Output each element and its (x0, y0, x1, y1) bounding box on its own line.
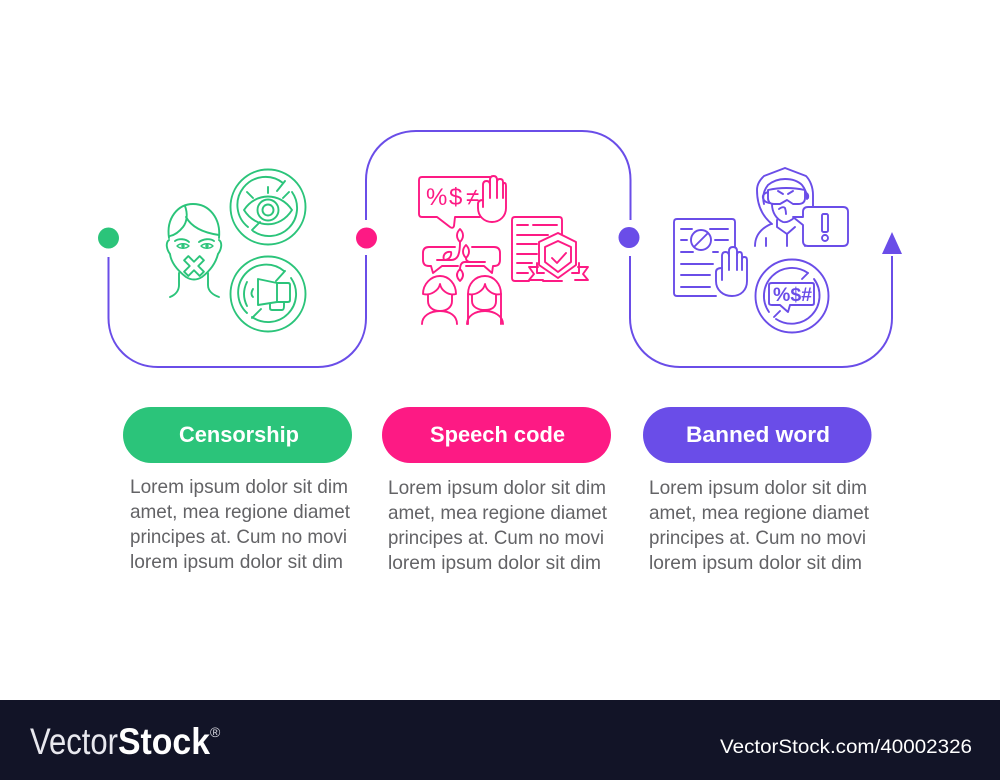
symbols in bubble: %$# (773, 285, 812, 306)
icon: hooded figure with alert (755, 168, 848, 246)
icon group: speech code (419, 176, 588, 324)
footer logo: ® (210, 724, 221, 740)
icon: certificate with shield (512, 217, 588, 281)
label: speech code (382, 407, 611, 463)
icon: crossed eye (230, 170, 306, 244)
icon: two women (422, 276, 503, 324)
text block: censorship: amet, mea regione diamet (130, 501, 351, 523)
icon: document with ban and hand (674, 219, 747, 296)
text block: speech code (388, 477, 608, 574)
text block: banned word: Lorem ipsum dolor sit dim (649, 477, 867, 499)
text block: censorship: principes at. Cum no movi (130, 526, 347, 548)
icon: gagged face (167, 204, 221, 297)
text block: censorship (130, 476, 351, 573)
step dot: pink (356, 228, 377, 248)
label: banned word (643, 407, 872, 463)
icon group: banned word (674, 168, 848, 332)
text block: banned word: principes at. Cum no movi (649, 527, 866, 549)
connector line (108, 131, 892, 367)
footer logo: Vector (30, 721, 118, 762)
footer logo: Stock (118, 721, 210, 762)
text block: banned word: lorem ipsum dolor sit dim (649, 552, 862, 574)
icon: speech bubble with hand (419, 176, 506, 228)
label: speech code: Speech code (430, 422, 565, 447)
text block: speech code: amet, mea regione diamet (388, 502, 608, 524)
symbols in bubble: %$≠ (426, 184, 479, 211)
text block: censorship: lorem ipsum dolor sit dim (130, 551, 343, 573)
icon group: censorship (167, 170, 306, 332)
text block: banned word: amet, mea regione diamet (649, 502, 870, 524)
label: censorship: Censorship (179, 422, 299, 447)
footer bar (0, 700, 1000, 780)
footer logo (30, 721, 221, 762)
text block: censorship: Lorem ipsum dolor sit dim (130, 476, 348, 498)
step dot: green (98, 228, 119, 248)
icon: crossed megaphone (230, 256, 306, 332)
arrowhead (882, 232, 902, 254)
label: censorship (123, 407, 352, 463)
icon: chat bubbles with vine (423, 229, 500, 281)
icon: crossed profanity bubble (756, 260, 828, 332)
text block: speech code: principes at. Cum no movi (388, 527, 604, 549)
label: banned word: Banned word (686, 422, 830, 447)
text block: speech code: lorem ipsum dolor sit dim (388, 552, 601, 574)
text block: banned word (649, 477, 870, 574)
text block: speech code: Lorem ipsum dolor sit dim (388, 477, 606, 499)
step dot: purple (618, 227, 640, 248)
footer image id: VectorStock.com/40002326 (720, 736, 972, 758)
